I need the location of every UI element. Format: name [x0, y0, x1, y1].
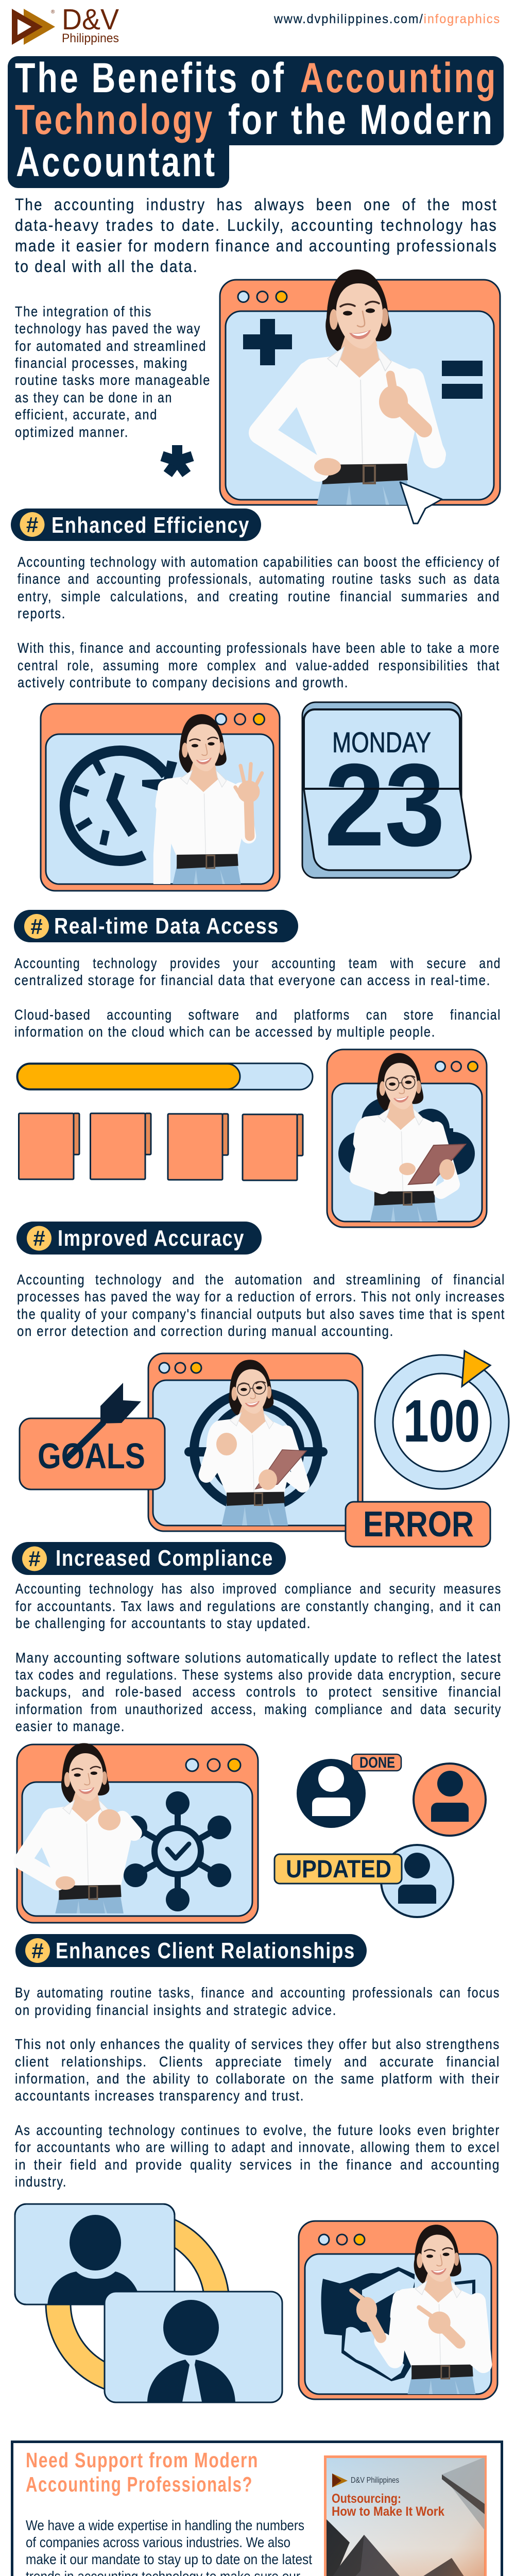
panel: network window [17, 1744, 258, 1923]
text: Improved Accuracy body [17, 1272, 505, 1339]
heading: Improved Accuracy: Improved Accuracy [58, 1226, 245, 1251]
card: client two [105, 2292, 282, 2402]
title: Accountant [16, 139, 217, 185]
panel: target window [148, 1353, 363, 1531]
text: Increased Compliance body: be challenging for accountants to stay updated. [15, 1615, 311, 1631]
text: Increased Compliance body [15, 1581, 502, 1734]
icon: network check [124, 1791, 231, 1911]
photo: accountant holding tablet [353, 1053, 466, 1235]
side paragraph [15, 303, 211, 440]
text: Enhanced Efficiency body [18, 554, 500, 690]
icon: clock with arrow [65, 751, 177, 861]
icon: cloud [338, 1097, 475, 1175]
heading: Enhanced Efficiency: # [26, 513, 38, 537]
callout: GOALS with dart [20, 1383, 165, 1489]
photo: accountant holding tablet with glasses [207, 1360, 306, 1535]
intro paragraph: to deal with all the data. [15, 257, 198, 276]
logo: D&V Philippines: Philippines [62, 31, 119, 45]
icon: equals [442, 361, 483, 399]
icon: target [189, 1392, 323, 1509]
illustration: video call cards [15, 2204, 282, 2402]
book cover: Outsourcing guide: Outsourcing: [332, 2492, 401, 2506]
panel: clock window [41, 704, 280, 891]
text: Enhanced Efficiency body: actively contribute to company decisions and growth. [18, 674, 349, 690]
book cover: Outsourcing guide: D&V Philippines [351, 2476, 399, 2485]
heading: Improved Accuracy: # [33, 1226, 45, 1250]
side paragraph: optimized manner. [15, 424, 129, 440]
logo: D&V Philippines: ® [51, 9, 55, 15]
card: client one [15, 2204, 175, 2308]
panel: hero window [220, 280, 500, 505]
panel: handshake window [299, 2221, 497, 2399]
heading: Improved Accuracy [16, 1222, 262, 1255]
text: support body: of companies across various industries. We also [26, 2534, 290, 2550]
heading: Need Support: Need Support from Modern [26, 2448, 259, 2472]
title [8, 55, 504, 188]
panel: cloud window [327, 1049, 487, 1227]
intro paragraph [15, 195, 497, 276]
heading: Enhances Client Relationships: # [31, 1939, 44, 1963]
icon: user updated: UPDATED [286, 1856, 391, 1883]
photo: accountant pointing forward [22, 1743, 134, 1931]
text: Real-time Data Access body: information on the cloud which can be accessed by multiple people. [14, 1024, 436, 1040]
text: support body [25, 2517, 312, 2576]
side paragraph: as they can be done in an [15, 389, 173, 405]
text: Enhances Client Relationships body: on providing financial insights and strategic advice. [15, 2002, 337, 2018]
icon: user orange [414, 1764, 486, 1836]
side paragraph: efficient, accurate, and [15, 406, 158, 422]
side paragraph: financial processes, making [15, 355, 188, 371]
heading: Need Support: Accounting Professionals? [26, 2472, 253, 2496]
book cover: Outsourcing guide [325, 2456, 485, 2576]
icon: plus [243, 319, 292, 365]
side paragraph: routine tasks more manageable [15, 372, 211, 388]
icon: handshake [321, 2267, 474, 2381]
title: The Benefits of [15, 55, 286, 101]
icon: user updated [274, 1845, 453, 1917]
photo: smiling accountant with thumbs up [261, 269, 437, 527]
gauge: 100 [375, 1351, 509, 1489]
text: Improved Accuracy body: on error detection and correction during manual accounting. [17, 1323, 394, 1339]
callout: GOALS with dart: GOALS [38, 1436, 145, 1476]
photo: accountant pointing at handshake [352, 2225, 484, 2410]
heading: Increased Compliance: Increased Compliance [56, 1546, 273, 1571]
text: Enhances Client Relationships body: industry. [15, 2174, 67, 2190]
text: Enhances Client Relationships body [15, 1985, 500, 2190]
heading: Enhanced Efficiency: Enhanced Efficiency [52, 513, 250, 538]
photo: accountant making OK sign [155, 714, 262, 899]
text: Enhanced Efficiency body: reports. [18, 605, 66, 621]
icon: calendar Monday 23: MONDAY [332, 726, 431, 758]
logo: D&V Philippines: D&V [62, 3, 119, 36]
heading: Need Support [26, 2448, 259, 2496]
heading: Enhanced Efficiency [11, 509, 261, 541]
title: Technology [15, 96, 214, 143]
text: support body: We have a wide expertise in handling the numbers [26, 2517, 304, 2533]
progress bar [17, 1063, 313, 1090]
icon: user done: DONE [359, 1754, 395, 1771]
heading: Increased Compliance: # [28, 1547, 41, 1571]
panel: call to action [12, 2442, 502, 2576]
heading: Real-time Data Access [14, 910, 298, 942]
callout: ERROR: ERROR [363, 1504, 474, 1544]
heading: Enhances Client Relationships [15, 1934, 367, 1967]
text: Real-time Data Access body [14, 955, 501, 1040]
heading: Real-time Data Access: Real-time Data Access [54, 913, 279, 939]
text: Increased Compliance body: easier to manage. [15, 1718, 125, 1734]
heading: Enhances Client Relationships: Enhances Client Relationships [56, 1938, 355, 1963]
text: support body: make it our mandate to stay up to date on the latest [26, 2551, 312, 2567]
logo: D&V Philippines [12, 3, 119, 45]
heading: Real-time Data Access: # [30, 914, 43, 939]
book cover: Outsourcing guide: How to Make It Work [332, 2504, 444, 2519]
text: Enhances Client Relationships body: accountants increases transparency and trust. [15, 2088, 304, 2104]
side paragraph: for automated and streamlined [15, 338, 207, 354]
heading: Increased Compliance [12, 1542, 286, 1575]
side paragraph: technology has paved the way [15, 320, 201, 336]
icon: user done [297, 1754, 401, 1828]
side paragraph: The integration of this [15, 303, 152, 319]
icon: calendar Monday 23 [302, 702, 471, 878]
icon: asterisk [160, 445, 194, 477]
folders [19, 1113, 303, 1180]
icon: cursor arrow [400, 482, 442, 523]
icon: calendar Monday 23: 23 [324, 740, 445, 871]
website url: www.dvphilippines.com/infographics [273, 12, 501, 26]
gauge: 100: 100 [403, 1387, 480, 1454]
